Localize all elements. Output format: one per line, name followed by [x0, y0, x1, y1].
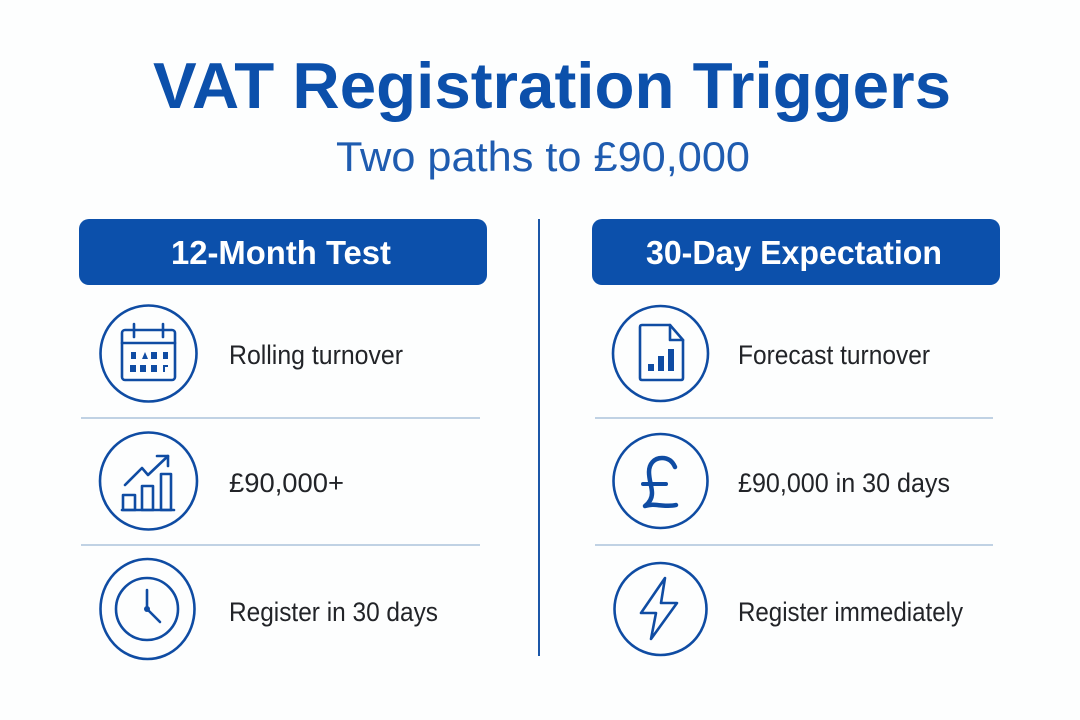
icon: lightning bolt: [614, 563, 706, 655]
heading: 30-Day Expectation: 30-Day Expectation: [646, 234, 942, 271]
panel: 12-Month Test: [79, 219, 487, 659]
text: forecast turnover: Forecast turnover: [738, 340, 930, 370]
heading: 30-Day Expectation: [592, 219, 1000, 285]
title: VAT Registration Triggers: [153, 49, 951, 122]
icon: document with chart: [613, 306, 708, 401]
icon: pound sign: [614, 434, 708, 528]
text: register immediately: Register immediately: [738, 597, 964, 627]
text: register in 30 days: Register in 30 days: [229, 597, 438, 627]
heading: 12-Month Test: [79, 219, 487, 285]
text: £90,000+: £90,000+: [229, 468, 344, 498]
heading: 12-Month Test: 12-Month Test: [171, 234, 391, 271]
text: £90,000 in 30 days: £90,000 in 30 days: [738, 468, 950, 498]
text: rolling turnover: Rolling turnover: [229, 340, 403, 370]
icon: rising bar chart: [100, 432, 197, 530]
column divider: [538, 219, 540, 656]
subtitle: Two paths to £90,000: [336, 133, 750, 180]
icon: clock: [100, 559, 194, 659]
icon: calendar: [100, 306, 196, 402]
panel: 30-Day Expectation: [592, 219, 1000, 655]
